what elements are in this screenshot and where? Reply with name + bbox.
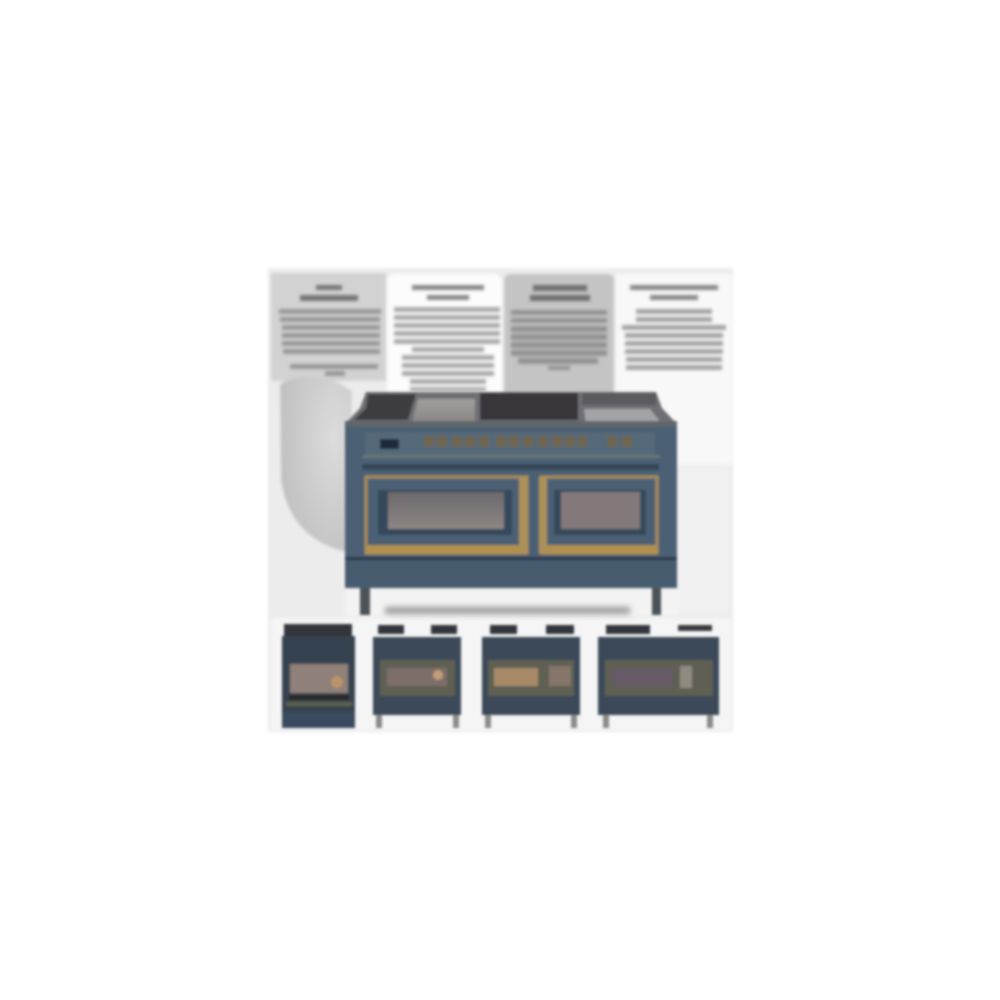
control panel [362, 432, 660, 458]
column 1 heading [300, 285, 358, 301]
small range cookers [282, 624, 719, 728]
small range 4 [598, 625, 719, 728]
left oven window [388, 492, 504, 529]
left griddle [412, 399, 475, 422]
display [380, 439, 399, 449]
small range 2 [373, 625, 461, 728]
centre burners [480, 393, 578, 420]
rear right burner [582, 393, 656, 405]
legs [360, 588, 661, 615]
column 2 body text [394, 307, 500, 391]
right oven window [561, 492, 640, 529]
large range cooker [345, 392, 677, 615]
background panel [268, 268, 733, 732]
column 4 heading [630, 285, 718, 300]
cooktop lip [345, 421, 677, 427]
column 4 body text [622, 309, 726, 370]
column 3 heading [530, 285, 590, 301]
panel: column 4 [616, 274, 732, 464]
column 2 heading [412, 285, 484, 300]
lower band [345, 590, 680, 616]
cooktop [345, 392, 677, 424]
trim rail [362, 455, 660, 458]
right lower background [677, 464, 729, 614]
small range 3 [482, 625, 580, 728]
small range 1 [282, 624, 355, 728]
lower drawer [345, 559, 677, 588]
shadow below control panel [362, 464, 659, 470]
floor shadow [385, 607, 630, 614]
right oven door [539, 477, 657, 554]
panel: column 1 [271, 273, 386, 552]
column 1 body text [279, 309, 381, 376]
panel: column 2 [387, 274, 502, 404]
left burners [354, 394, 416, 420]
text blocks [279, 285, 726, 391]
range body [345, 426, 677, 588]
gold knobs [424, 436, 632, 447]
column 3 body text [511, 310, 607, 370]
bottom row background [271, 618, 731, 730]
curved grey shape [280, 377, 352, 552]
panel: column 3 [504, 274, 614, 404]
right griddle [584, 409, 662, 424]
left oven door [366, 477, 527, 554]
